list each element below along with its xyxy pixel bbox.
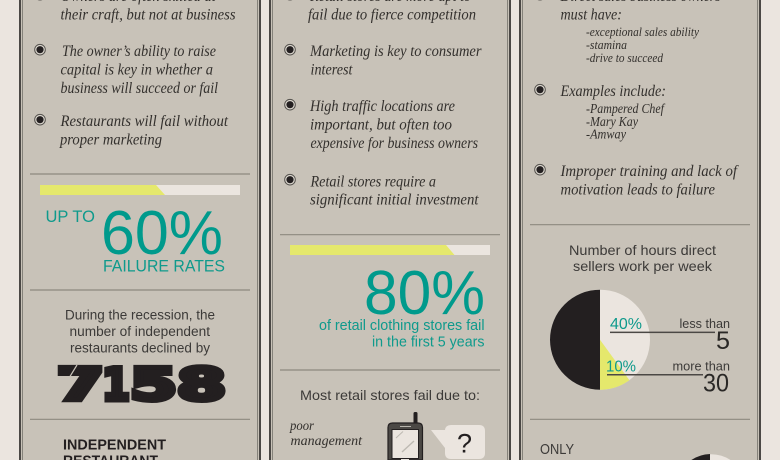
stat: 80% of retail clothing stores fail: 80% [364, 259, 485, 328]
stat: 7158: 8 [177, 360, 226, 411]
bullet: direct sales owners must have: -stamina [586, 37, 627, 52]
pie label: 40% less than 5: 5 [716, 327, 730, 355]
pie label: 10% more than 30: 10% [606, 358, 636, 375]
bullet: high traffic locations: expensive for business owners [310, 135, 478, 152]
progress bar: 80 percent [290, 245, 490, 255]
bullet: direct sales owners must have: -drive to succeed [586, 50, 663, 65]
heading: hours direct sellers work [569, 242, 716, 274]
bullet: initial investment [285, 173, 479, 209]
bullet: high traffic locations: High traffic locations are [309, 98, 455, 115]
bullet: examples: -Pampered Chef [586, 101, 666, 116]
pie label: 10% more than 30 [606, 358, 730, 397]
icon: speech bubble with question mark [431, 425, 485, 459]
pie chart: hours per week [550, 290, 730, 397]
bullet: improper training: motivation leads to failure [560, 182, 715, 198]
bullet: examples [535, 83, 666, 142]
bullet: raising capital: capital is key in whether a [60, 62, 213, 78]
label: poor management: poor [289, 418, 315, 433]
stat: 7158: 5 [130, 360, 177, 411]
pie label: 10% more than 30: more than [672, 359, 730, 373]
label: poor management [289, 418, 363, 448]
label: poor management: management [290, 433, 363, 448]
bullet: high traffic locations: important, but often too [310, 117, 452, 134]
bullet: direct sales owners must have [535, 0, 720, 65]
pie label: 40% less than 5 [610, 316, 730, 355]
stat: 7158: 1 [102, 360, 130, 411]
panel: restaurants [19, 0, 261, 460]
bullet: direct sales owners must have: must have: [560, 6, 622, 24]
bullet: initial investment: significant initial investment [310, 192, 479, 209]
stat: up to 60% failure rates: 60% [101, 199, 223, 268]
stat: up to 60% failure rates: UP TO [46, 207, 95, 226]
pie label: 10% more than 30: 30 [703, 369, 729, 397]
pie label: 40% less than 5: less than [680, 317, 730, 331]
text: recession decline: restaurants declined by [70, 341, 210, 356]
pie chart: only share [691, 454, 730, 460]
icon: mobile phone [388, 412, 422, 460]
bullet: initial investment: Retail stores require a [310, 173, 436, 190]
bullet: high traffic locations [285, 98, 478, 152]
text: recession decline: number of independent [70, 324, 210, 339]
bullet: direct sales owners must have: -exceptional sales ability [586, 24, 699, 39]
bullet: marketing [35, 113, 229, 148]
stat: up to 60% failure rates [46, 199, 225, 275]
bullet: marketing: proper marketing [59, 132, 162, 148]
bullet: improper training: Improper training and lack of [560, 163, 739, 180]
stat: 80% of retail clothing stores fail [319, 259, 485, 351]
stat: 7158: 7 [57, 360, 104, 411]
bullet: owners skilled at craft [35, 0, 236, 24]
text: recession decline: During the recession, the [65, 307, 215, 322]
stat: up to 60% failure rates: FAILURE RATES [103, 256, 225, 275]
bullet: marketing: Restaurants will fail without [60, 113, 229, 130]
bullet: competition: fail due to fierce competition [308, 6, 476, 24]
text: only: ONLY [540, 441, 574, 458]
stat: 80% of retail clothing stores fail: of retail clothing stores fail [319, 318, 484, 334]
heading: independent restaurant: INDEPENDENT [63, 438, 166, 454]
bullet: marketing is key [285, 43, 482, 78]
stat: 80% of retail clothing stores fail: in the first 5 years [372, 335, 484, 351]
bullet: marketing is key: interest [310, 62, 353, 78]
text: recession decline [65, 307, 215, 356]
pie label: 40% less than 5: 40% [610, 316, 642, 333]
heading: hours direct sellers work: Number of hours direct [569, 242, 716, 258]
bullet: raising capital [35, 43, 218, 97]
panel: direct sales [519, 0, 761, 460]
progress bar: 60 percent [40, 185, 240, 195]
bullet: examples: Examples include: [560, 83, 666, 100]
bullet: examples: -Mary Kay [586, 114, 638, 129]
bullet: owners skilled at craft: their craft, but not at business [60, 6, 236, 24]
bullet: examples: -Amway [586, 127, 626, 142]
bullet: competition [285, 0, 476, 24]
bullet: raising capital: The owner’s ability to raise [62, 43, 216, 60]
bullet: raising capital: business will succeed or fail [60, 80, 218, 97]
panel: retail [269, 0, 511, 460]
bullet: improper training [535, 163, 739, 198]
bullet: marketing is key: Marketing is key to consumer [309, 43, 482, 60]
icon: speech bubble with question mark: ? [457, 429, 472, 459]
heading: most retail stores fail due to: Most retail stores fail due to: [300, 387, 480, 403]
stat: 7158 [57, 360, 226, 411]
heading: hours direct sellers work: sellers work per week [573, 258, 713, 274]
